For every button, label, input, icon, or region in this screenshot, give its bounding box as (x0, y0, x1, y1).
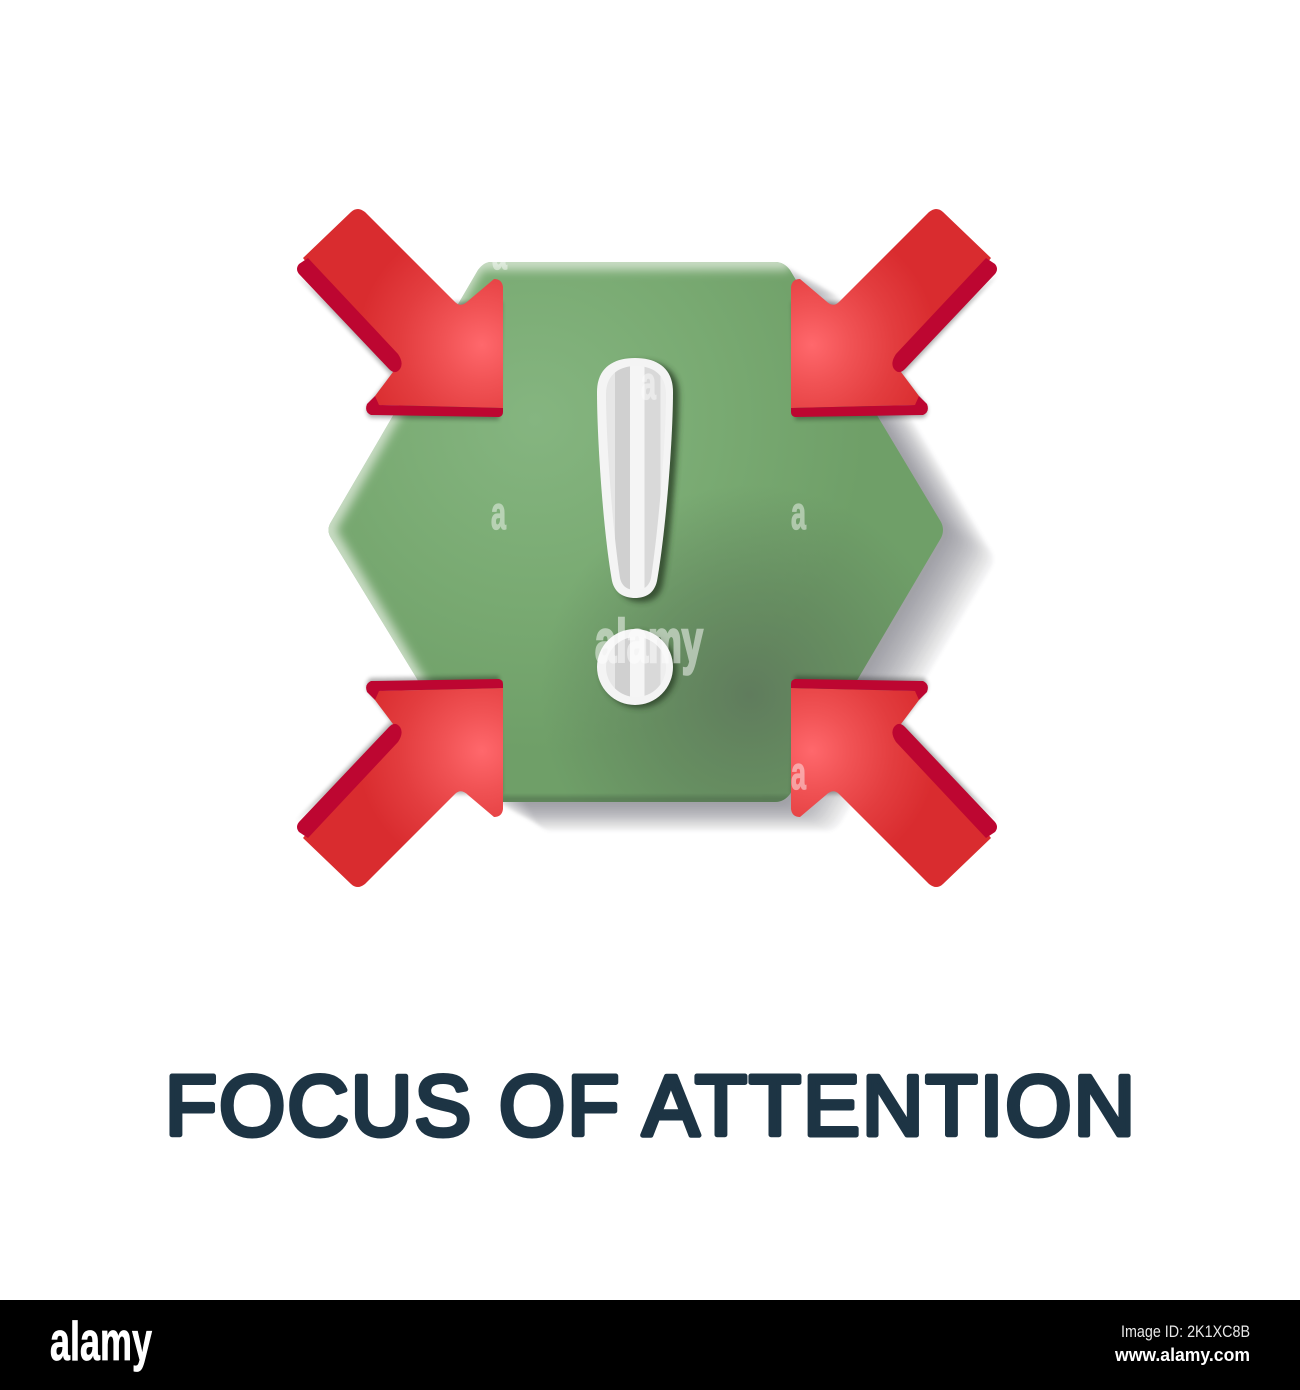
watermark letter on bottom right arrow: a (791, 747, 806, 799)
arrow: top left (296, 209, 503, 420)
arrow: bottom left (296, 676, 503, 887)
icon: focus of attention (296, 209, 998, 887)
arrow: bottom right (791, 676, 998, 887)
exclamation mark (597, 357, 679, 708)
watermark letters on hexagon (491, 262, 806, 530)
website: www.alamy.com (1114, 1345, 1250, 1365)
watermark letters on hexagon: a (491, 487, 506, 539)
arrow: top right (791, 209, 998, 420)
exclamation dot (597, 629, 677, 708)
exclamation bar (597, 358, 679, 602)
footer bar (0, 1300, 1300, 1390)
centre watermark: alamy (595, 608, 703, 675)
watermark letters on hexagon: a (791, 487, 806, 539)
green hexagon panel (327, 227, 943, 804)
footer logo: alamy (50, 1310, 152, 1372)
title: FOCUS OF ATTENTION (165, 1059, 1135, 1154)
image id: Image ID: 2K1XC8B (1121, 1322, 1250, 1341)
hexagon drop shadow (334, 265, 993, 831)
watermark letters on hexagon: a (492, 227, 507, 279)
watermark letter on exclamation bar: a (641, 357, 656, 409)
